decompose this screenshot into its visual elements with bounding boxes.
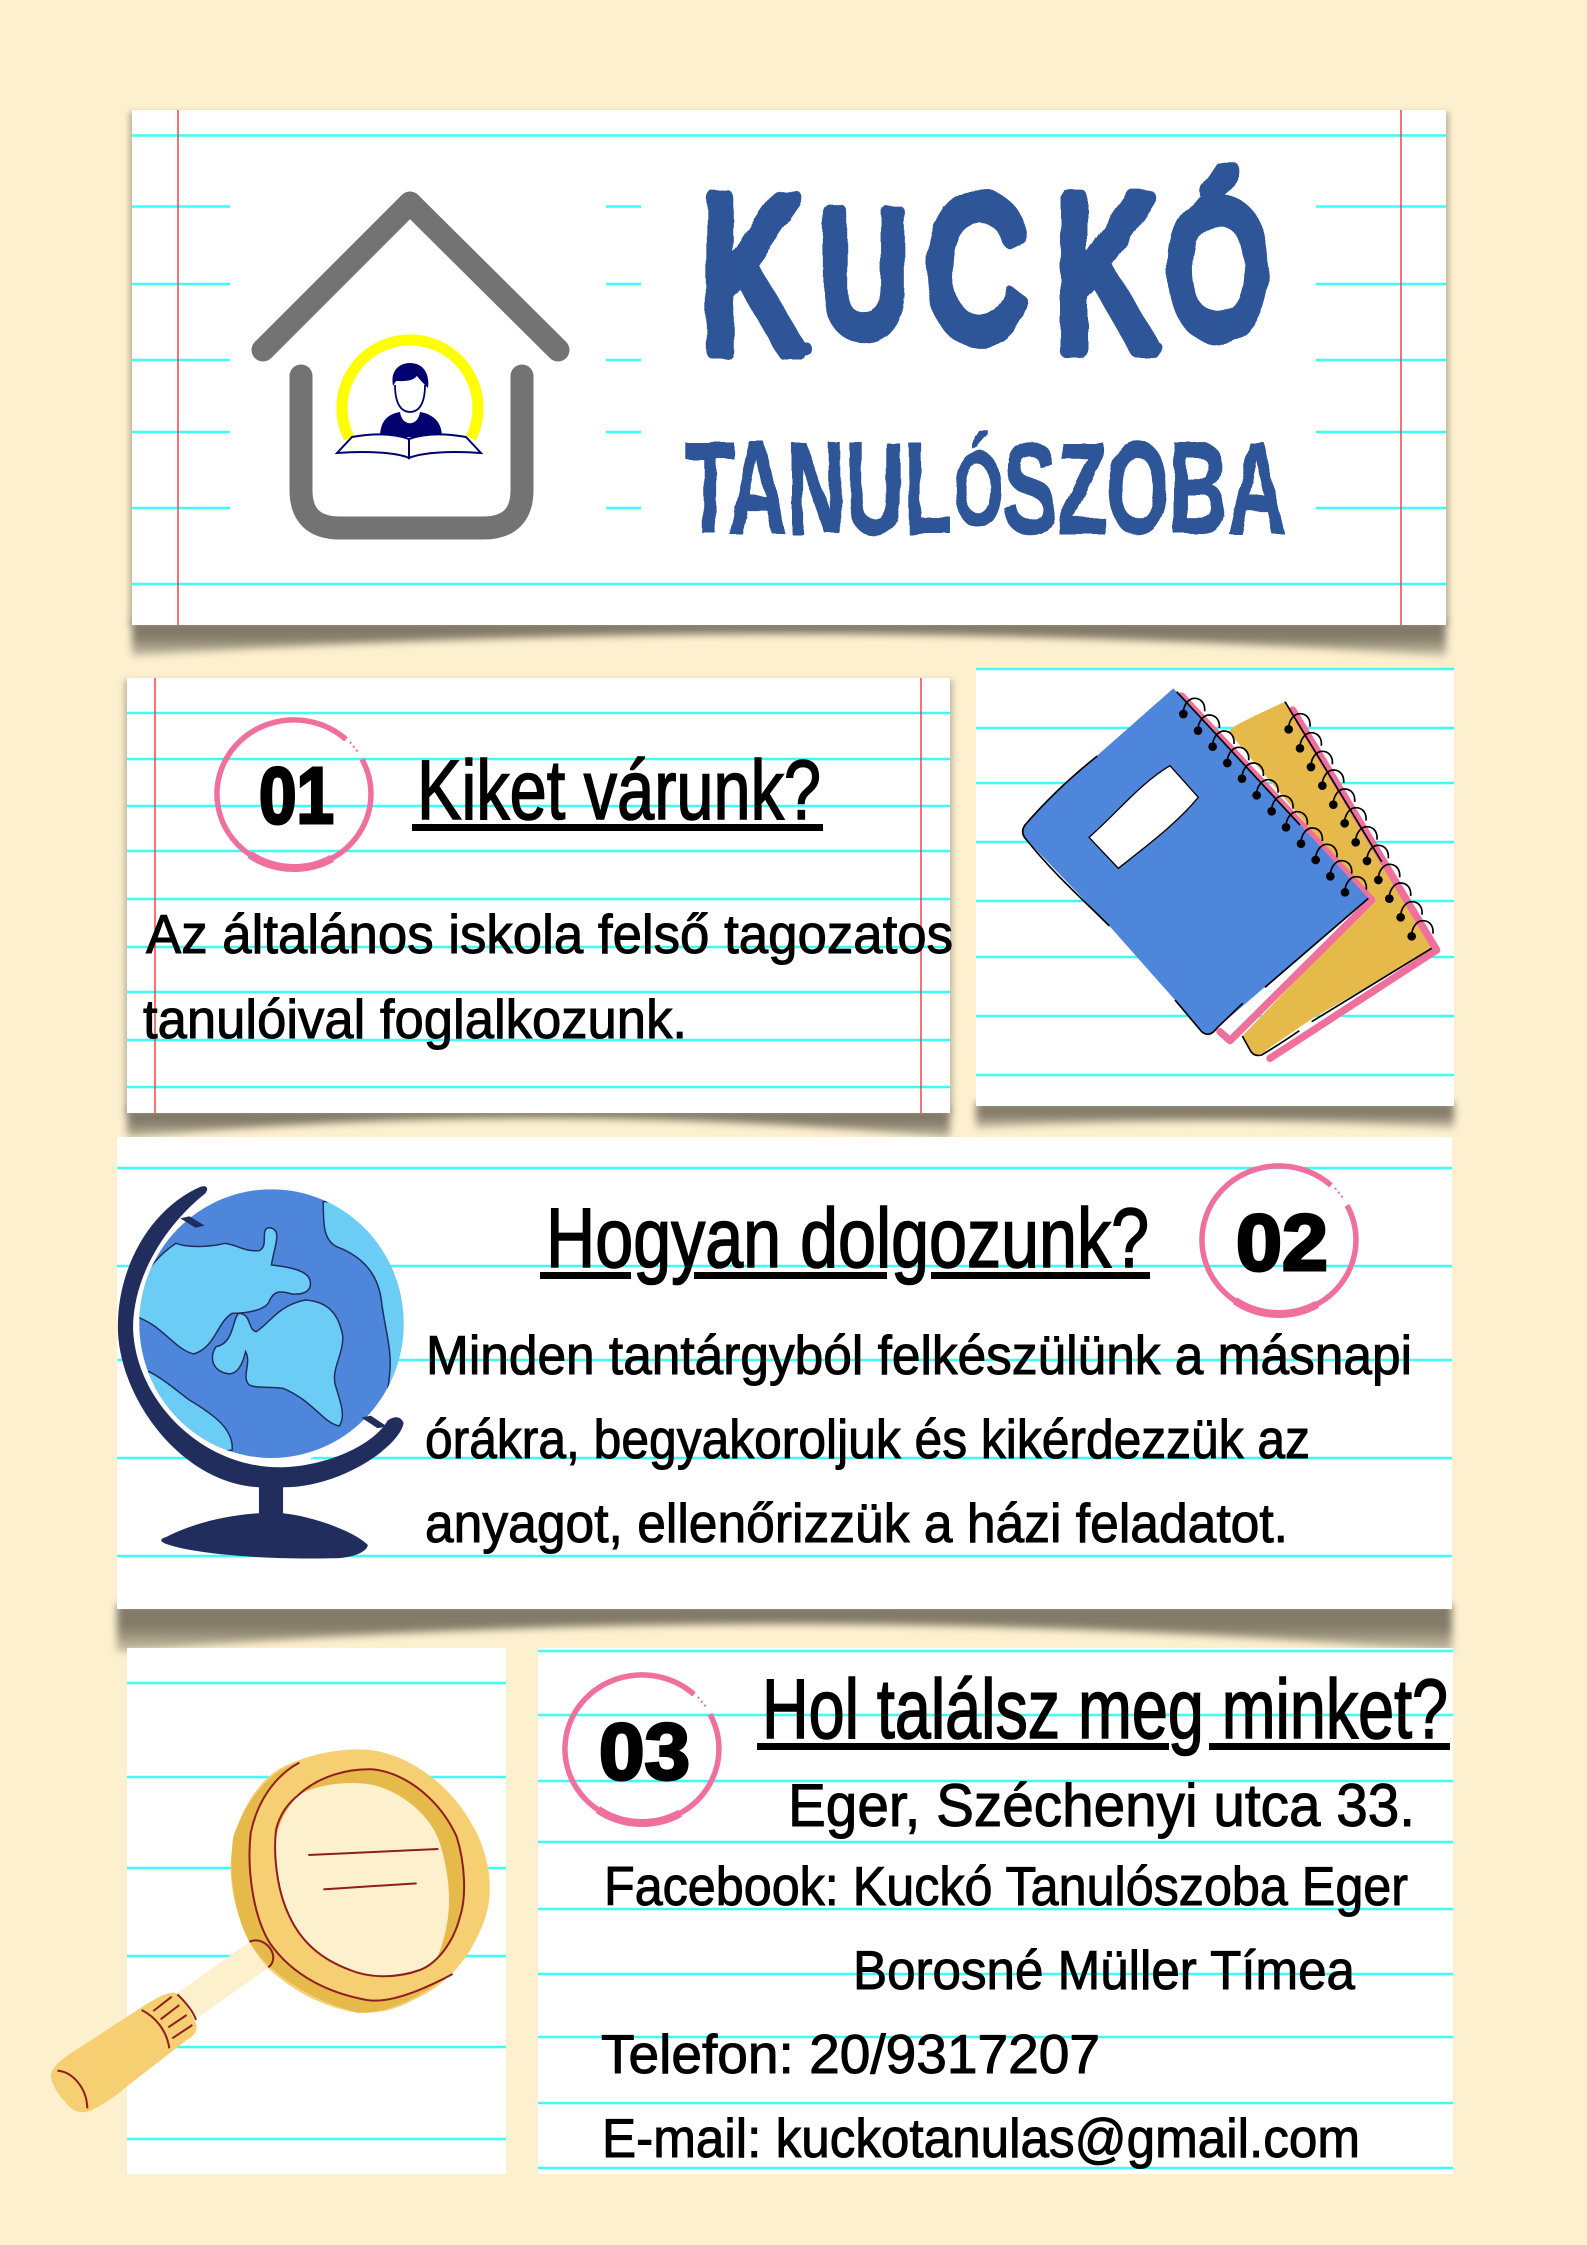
number badge 01 <box>217 720 371 868</box>
logo title: Kuckó: C <box>926 159 1026 380</box>
number badge 03: 03 <box>599 1707 690 1796</box>
text block: address: Eger, Széchenyi utca 33. <box>788 1772 1415 1839</box>
number badge 01: 01 <box>259 751 334 840</box>
number badge 02 <box>1202 1166 1356 1314</box>
panel: magnifier illustration <box>51 1648 506 2174</box>
logo title: Kuckó: U <box>820 178 907 369</box>
text block: contacts <box>601 1855 1408 2169</box>
logo title: Kuckó: Ó <box>1168 166 1269 374</box>
text block: how we work <box>425 1324 1412 1554</box>
heading: Kiket várunk?: Kiket várunk? <box>417 743 821 837</box>
logo title: Kuckó: K <box>1054 152 1157 398</box>
logo title: Kuckó: K <box>700 152 803 398</box>
text block: who we welcome <box>143 903 953 1050</box>
panel: 01 who we welcome <box>124 678 953 1138</box>
logo subtitle: Tanulószoba: Ó <box>953 432 1003 548</box>
icon: globe <box>118 1177 421 1559</box>
icon: house logo with reader <box>263 203 558 528</box>
panel: notebooks illustration <box>976 668 1454 1128</box>
number badge 02: 02 <box>1236 1198 1328 1287</box>
icon: magnifying glass <box>51 1749 490 2112</box>
number badge 03 <box>565 1675 719 1823</box>
panel: 03 where to find us <box>538 1648 1453 2174</box>
logo title: Kuckó <box>700 152 1269 398</box>
panel: 02 how we work <box>117 1137 1452 1652</box>
text block: contacts: E-mail: kuckotanulas@gmail.com <box>602 2107 1360 2169</box>
text block: contacts: Borosné Müller Tímea <box>853 1939 1355 2001</box>
text block: who we welcome: tanulóival foglalkozunk. <box>143 988 687 1050</box>
logo subtitle: Tanulószoba: SZOBA <box>1003 415 1286 561</box>
logo subtitle: Tanulószoba: TANUL <box>685 415 1116 561</box>
text block: how we work: anyagot, ellenőrizzük a házi feladatot. <box>425 1492 1288 1554</box>
text block: who we welcome: Az általános iskola felső tagozatos <box>146 903 953 965</box>
panel: header logo card <box>129 110 1449 656</box>
text block: how we work: Minden tantárgyból felkészülünk a másnapi <box>426 1324 1412 1386</box>
text block: how we work: órákra, begyakoroljuk és kikérdezzük az <box>425 1408 1310 1470</box>
icon: spiral notebooks <box>1023 688 1437 1058</box>
text block: contacts: Telefon: 20/9317207 <box>601 2023 1100 2085</box>
heading: Hogyan dolgozunk?: Hogyan dolgozunk? <box>546 1191 1149 1285</box>
text block: contacts: Facebook: Kuckó Tanulószoba Eger <box>604 1855 1408 1917</box>
